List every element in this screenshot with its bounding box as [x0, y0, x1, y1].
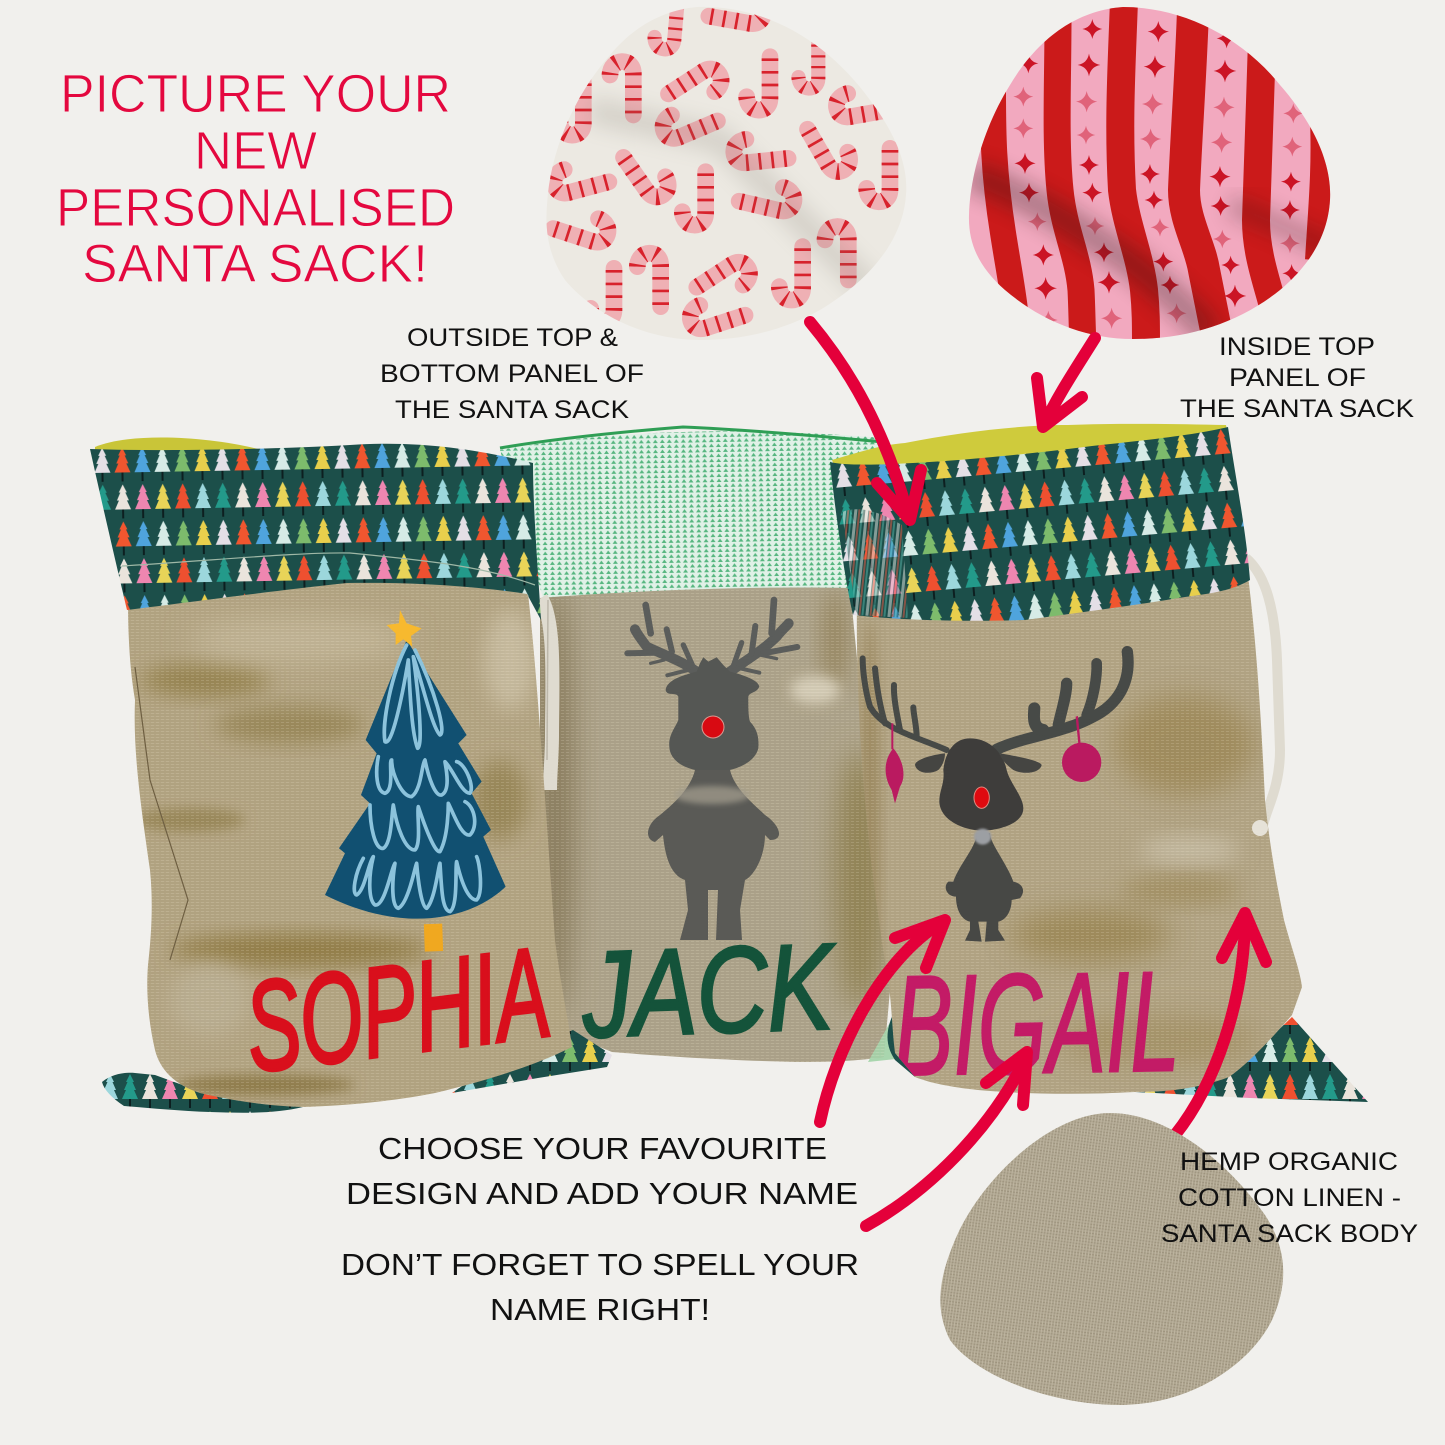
- arrow: choose design to reindeer: [820, 920, 945, 1122]
- swatch: candy cane fabric: [540, 0, 920, 345]
- text: choose your design: [346, 1131, 858, 1211]
- label: inside panel: THE SANTA SACK: [1180, 395, 1414, 423]
- knot: [1252, 820, 1268, 836]
- icon: reindeer with baubles: [863, 652, 1128, 942]
- text: spelling reminder: NAME RIGHT!: [490, 1292, 710, 1327]
- label: outside panel: THE SANTA SACK: [395, 396, 629, 424]
- text: choose your design: CHOOSE YOUR FAVOURITE: [378, 1131, 827, 1166]
- title: PICTURE YOUR: [60, 64, 451, 124]
- sack: Jack (middle): [500, 427, 905, 1065]
- label: inside panel: [1180, 333, 1414, 423]
- label: linen body: [1161, 1148, 1418, 1248]
- tree band: Abigail: [830, 427, 1250, 621]
- title: SANTA SACK!: [82, 234, 428, 294]
- drawstring: left sack: [541, 598, 552, 790]
- label: linen body: HEMP ORGANIC: [1180, 1148, 1398, 1176]
- name: Abigail: ABIGAIL: [829, 942, 1180, 1107]
- arrow: stripe fabric to inside panel: [1037, 338, 1095, 427]
- tree band: Sophia: [90, 444, 541, 620]
- label: inside panel: INSIDE TOP: [1219, 333, 1375, 361]
- swatch: striped star fabric: [960, 0, 1340, 345]
- label: outside panel: OUTSIDE TOP &: [407, 324, 618, 352]
- arrow: candy fabric to outside panel: [810, 322, 921, 520]
- label: inside panel: PANEL OF: [1229, 364, 1366, 392]
- label: outside panel: [380, 324, 644, 424]
- fabric fold on Abigail band: [842, 509, 908, 618]
- title: [56, 64, 455, 294]
- swatch: hemp linen fabric: [940, 1113, 1283, 1405]
- text: choose your design: DESIGN AND ADD YOUR NAME: [346, 1176, 858, 1211]
- title: NEW: [194, 121, 317, 181]
- arrow: linen swatch to sack body: [1175, 913, 1266, 1135]
- drawstring: right sack: [1246, 558, 1280, 830]
- icon: reindeer: [627, 600, 797, 940]
- title: PERSONALISED: [56, 178, 455, 238]
- text: spelling reminder: DON’T FORGET TO SPELL YOUR: [341, 1247, 859, 1282]
- text: spelling reminder: [341, 1247, 859, 1327]
- label: outside panel: BOTTOM PANEL OF: [380, 360, 644, 388]
- label: linen body: SANTA SACK BODY: [1161, 1220, 1418, 1248]
- icon: Christmas tree with star: [325, 610, 506, 952]
- sack: Sophia (left): [90, 437, 612, 1113]
- name: Jack: JACK: [579, 918, 838, 1063]
- sack: Abigail (right): [829, 424, 1368, 1107]
- name: Sophia: SOPHIA: [238, 921, 557, 1100]
- arrow: spell name to Abigail: [866, 1052, 1027, 1226]
- label: linen body: COTTON LINEN -: [1178, 1184, 1401, 1212]
